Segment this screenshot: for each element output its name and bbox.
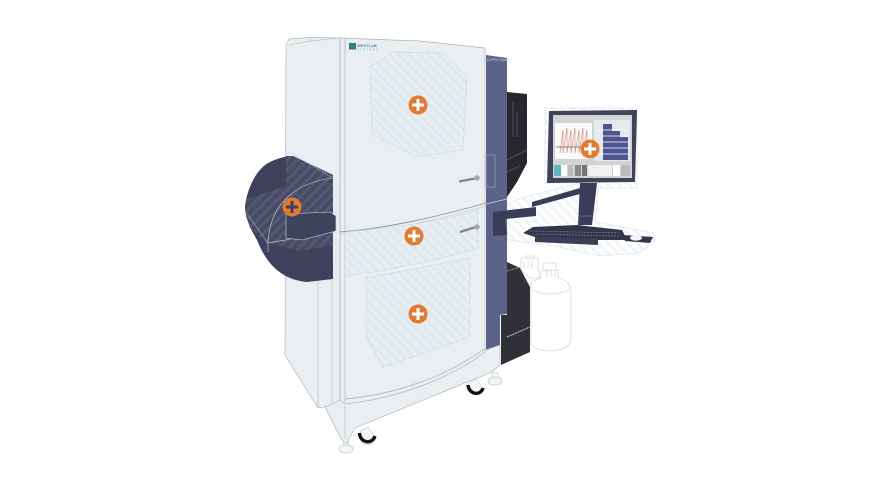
marker: top door — [408, 96, 428, 114]
caster wheel rear — [468, 379, 483, 394]
front bottle — [531, 263, 571, 351]
cabinet base and legs — [325, 345, 502, 453]
marker: middle drawer — [404, 226, 424, 246]
blue side panel: ELPRO System — [487, 58, 511, 62]
door handle lower — [460, 224, 480, 232]
front door panels — [340, 38, 486, 404]
rear bottle — [521, 256, 540, 278]
marker: detail — [282, 198, 302, 216]
keyboard tray — [523, 225, 653, 245]
cabinet side panel — [285, 38, 340, 408]
logo: SYSTEMS — [357, 48, 379, 52]
marker: lower door — [408, 304, 428, 324]
rear dark unit upper — [507, 92, 527, 197]
door handle upper — [459, 175, 480, 182]
hatched zone: detail — [245, 156, 333, 251]
hatched zone: middle drawer — [345, 210, 478, 276]
logo — [349, 43, 379, 52]
rear dark unit lower — [501, 262, 530, 365]
hatched zone: top door — [370, 52, 467, 157]
marker: monitor — [580, 140, 600, 158]
hatched zone: workstation — [508, 108, 655, 256]
monitor arm — [493, 183, 597, 236]
logo: WESTLAB — [357, 43, 377, 48]
blue side panel — [486, 55, 511, 357]
hatched zone: lower door — [366, 258, 470, 367]
caster wheel front — [360, 427, 376, 445]
monitor — [547, 110, 637, 183]
magnified circular detail — [245, 150, 336, 282]
